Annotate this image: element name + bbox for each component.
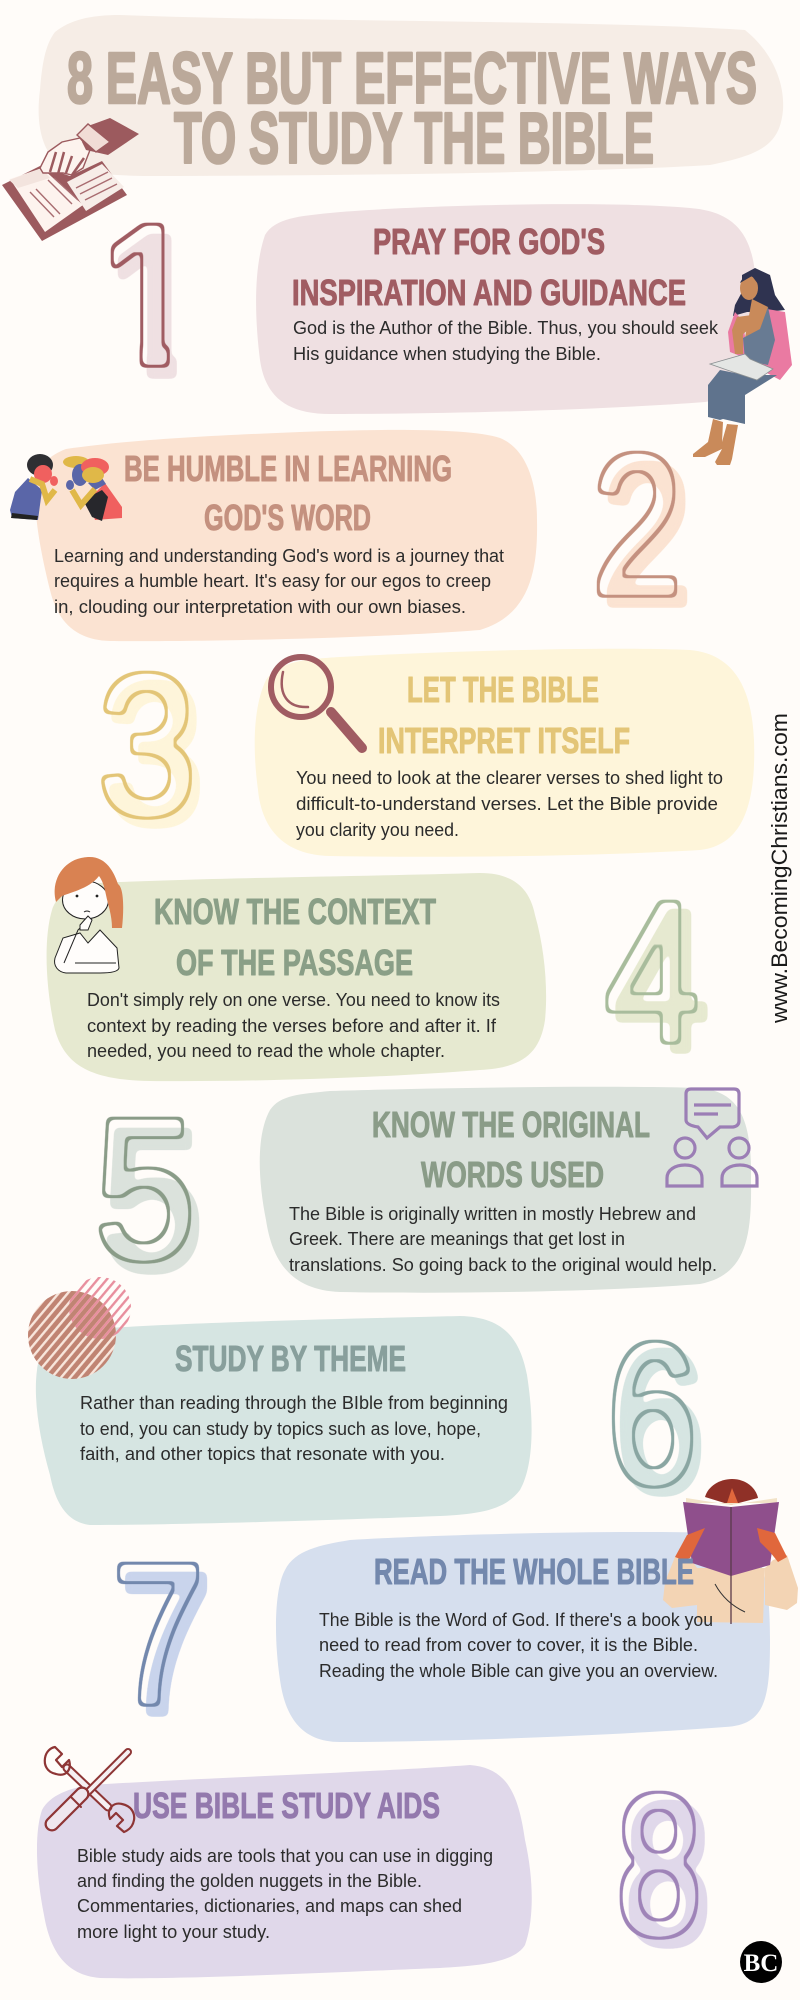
logo: BC badge	[740, 1941, 782, 1983]
body text: Rather than reading through the BIble from beginning	[80, 1393, 508, 1413]
body text	[319, 1610, 718, 1681]
heading	[124, 448, 452, 538]
heading: GOD'S WORD	[204, 497, 371, 538]
body text	[289, 1204, 717, 1275]
heading: WORDS USED	[421, 1154, 604, 1195]
logo: BC badge: BC	[744, 1950, 778, 1977]
panel: use bible study aids	[37, 1765, 532, 1978]
number 1: 1	[103, 195, 209, 418]
heading: LET THE BIBLE	[407, 669, 599, 710]
body text: needed, you need to read the whole chapter.	[87, 1041, 445, 1061]
panel: let the bible	[255, 649, 754, 857]
heading: OF THE PASSAGE	[176, 942, 413, 983]
body text: and finding the golden nuggets in the Bible.	[77, 1871, 422, 1891]
number 5: 5	[103, 1089, 203, 1312]
side website text: www.BecomingChristians.com	[767, 713, 792, 1024]
number 4: 4	[605, 861, 699, 1084]
icon: hand on open bible	[2, 118, 139, 241]
panel: know the context	[47, 873, 546, 1081]
icon: hatched circles	[28, 1277, 131, 1379]
body text: in, clouding our interpretation with our own biases.	[54, 597, 466, 617]
heading: INSPIRATION AND GUIDANCE	[292, 272, 686, 313]
number 5: 5	[95, 1078, 195, 1301]
heading: PRAY FOR GOD'S	[373, 221, 605, 262]
number 3: 3	[98, 632, 196, 856]
heading: BE HUMBLE IN LEARNING	[124, 448, 452, 489]
body text: Reading the whole Bible can give you an overview.	[319, 1661, 718, 1681]
number 2: 2	[603, 424, 691, 647]
body text	[296, 768, 723, 840]
body text: requires a humble heart. It's easy for our egos to creep	[54, 571, 491, 591]
body text	[80, 1393, 508, 1464]
number 7: 7	[112, 1521, 204, 1746]
panel: know the original	[260, 1087, 751, 1293]
number 8: 8	[617, 1753, 701, 1977]
number 8: 8	[626, 1762, 710, 1986]
body text: Greek. There are meanings that get lost in	[289, 1229, 625, 1249]
icon: thinking girl	[55, 857, 123, 973]
body text: The Bible is the Word of God. If there's a book you	[319, 1610, 713, 1630]
body text	[77, 1846, 493, 1942]
icon: woman reading a book	[663, 1479, 798, 1624]
heading: KNOW THE CONTEXT	[154, 891, 436, 932]
title text	[67, 39, 757, 179]
heading	[378, 669, 630, 761]
heading	[372, 1104, 650, 1195]
number 2: 2	[593, 414, 681, 637]
heading: STUDY BY THEME	[175, 1338, 406, 1379]
body text: His guidance when studying the Bible.	[293, 344, 601, 364]
number 3: 3	[106, 641, 204, 865]
number 1	[110, 222, 177, 379]
body text: difficult-to-understand verses. Let the Bible provide	[296, 794, 718, 814]
icon: two people talking	[667, 1089, 757, 1186]
body text	[293, 318, 719, 364]
number 4: 4	[615, 870, 709, 1093]
body text: You need to look at the clearer verses to shed light to	[296, 768, 723, 788]
title banner	[39, 15, 783, 179]
body text: The Bible is originally written in mostly Hebrew and	[289, 1204, 696, 1224]
number 7: 7	[120, 1531, 212, 1756]
body text: more light to your study.	[77, 1922, 270, 1942]
panel: study by theme	[36, 1316, 532, 1525]
icon: woman praying with bible	[693, 268, 792, 465]
body text	[87, 990, 500, 1061]
icon: magnifying glass	[271, 657, 362, 748]
body text: Learning and understanding God's word is a journey that	[54, 546, 504, 566]
panel: pray	[256, 204, 756, 414]
icon: crossed wrench and screwdriver	[45, 1747, 134, 1832]
body text: to end, you can study by topics such as love, hope,	[80, 1419, 481, 1439]
body text: Commentaries, dictionaries, and maps can shed	[77, 1896, 462, 1916]
number 6: 6	[616, 1311, 704, 1534]
number 6: 6	[608, 1303, 696, 1526]
heading: INTERPRET ITSELF	[378, 720, 630, 761]
body text: you clarity you need.	[296, 820, 459, 840]
body text: Bible study aids are tools that you can use in digging	[77, 1846, 493, 1866]
number 1: 1	[96, 184, 202, 407]
panel: read the whole bible	[276, 1479, 798, 1742]
body text: faith, and other topics that resonate with you.	[80, 1444, 445, 1464]
body text	[54, 546, 504, 617]
body text: translations. So going back to the original would help.	[289, 1255, 717, 1275]
heading: KNOW THE ORIGINAL	[372, 1104, 650, 1145]
body text: need to read from cover to cover, it is the Bible.	[319, 1635, 698, 1655]
heading	[292, 221, 686, 313]
body text: God is the Author of the Bible. Thus, you should seek	[293, 318, 719, 338]
panel: be humble	[35, 430, 537, 641]
heading: USE BIBLE STUDY AIDS	[133, 1785, 440, 1826]
body text: context by reading the verses before and after it. If	[87, 1016, 497, 1036]
heading	[154, 891, 436, 983]
icon: two people praying	[10, 454, 122, 521]
body text: Don't simply rely on one verse. You need to know its	[87, 990, 500, 1010]
